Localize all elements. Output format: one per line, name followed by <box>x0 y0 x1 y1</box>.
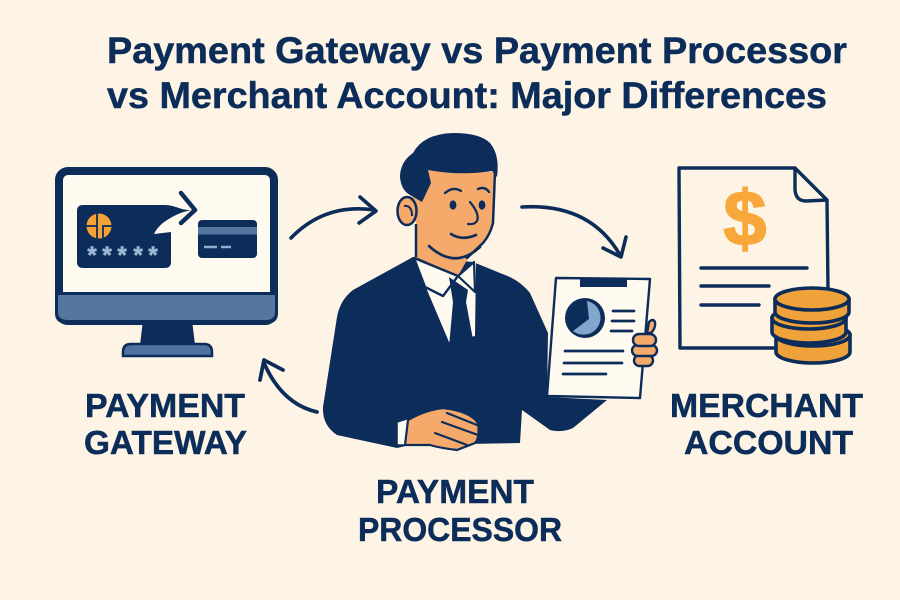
arrow: gateway to processor <box>291 197 376 238</box>
label: payment processor: PAYMENT <box>376 473 534 510</box>
hand holding clipboard <box>632 320 657 366</box>
credit card: * <box>102 242 112 269</box>
shirt <box>414 258 476 342</box>
coin stack <box>772 288 850 363</box>
tie <box>449 277 474 371</box>
label: merchant account: ACCOUNT <box>684 424 853 461</box>
credit card: * <box>148 242 158 269</box>
arrow: processor to merchant <box>522 207 626 257</box>
label: payment gateway: PAYMENT <box>85 387 245 424</box>
credit card <box>77 193 195 269</box>
label: merchant account: MERCHANT <box>670 387 863 424</box>
credit card: * <box>133 242 143 269</box>
hair <box>400 133 498 202</box>
jacket <box>323 257 607 448</box>
face details <box>445 188 489 238</box>
small card <box>198 220 257 258</box>
pie chart <box>565 298 605 338</box>
dollar sign: $ <box>723 174 767 262</box>
title <box>107 30 847 116</box>
clipboard report <box>547 278 650 398</box>
label: payment gateway <box>84 387 247 461</box>
label: payment processor <box>358 473 562 548</box>
label: payment processor: PROCESSOR <box>358 511 562 548</box>
collar <box>414 258 458 296</box>
credit card: * <box>117 242 127 269</box>
label: payment gateway: GATEWAY <box>84 424 247 461</box>
arrow: processor back to gateway <box>260 360 317 412</box>
label: merchant account <box>670 387 863 461</box>
person: payment processor <box>323 133 607 450</box>
icon: computer monitor with payment cards <box>56 171 276 356</box>
title: Payment Gateway vs Payment Processor <box>107 30 847 71</box>
icon: merchant account document with coins <box>679 168 850 363</box>
ear <box>398 197 416 225</box>
credit card: * <box>87 242 97 269</box>
lower hand <box>397 408 479 450</box>
title: vs Merchant Account: Major Differences <box>107 75 827 116</box>
head <box>408 170 495 276</box>
